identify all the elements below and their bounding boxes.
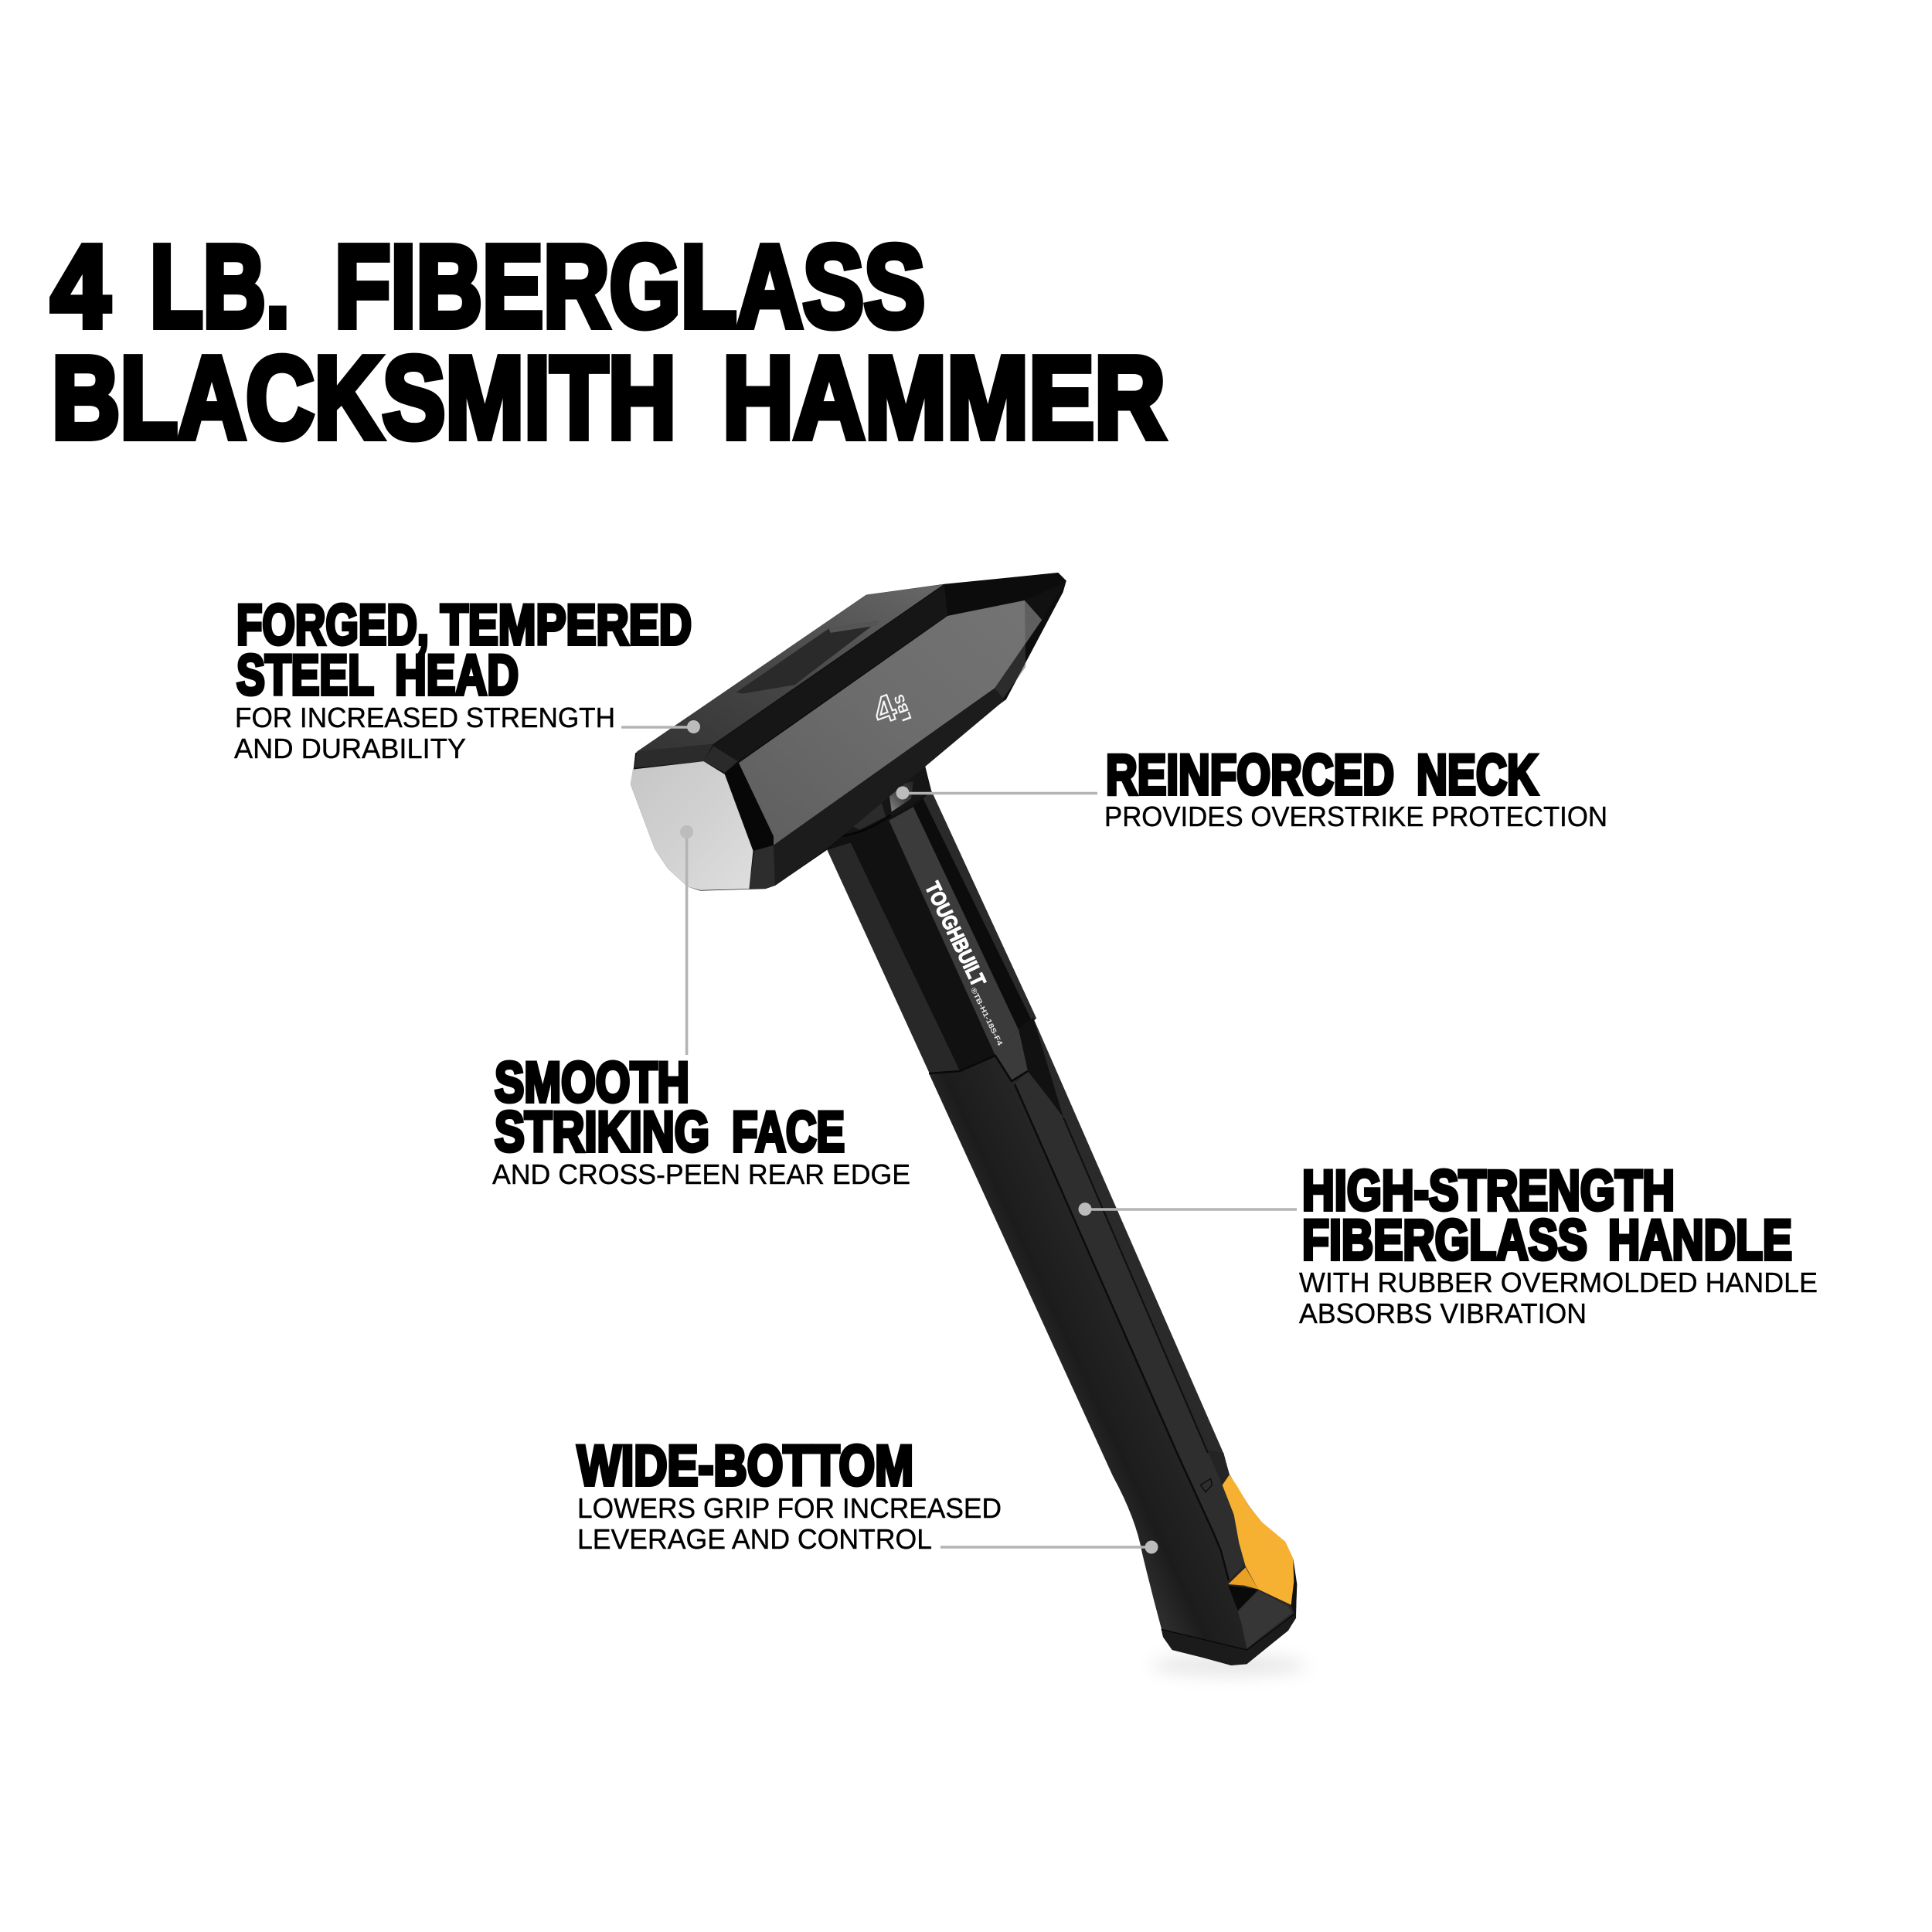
lower chamfer [774, 688, 1005, 886]
heading: FORGED, [236, 594, 429, 657]
heading: REINFORCED [1106, 743, 1394, 807]
brand mark on handle: TOUGHBUILT [920, 878, 990, 991]
heading line 2: FIBERGLASS [1302, 1209, 1587, 1272]
callout: high-strength fiberglass handle [1079, 1159, 1818, 1329]
description: WITH RUBBER OVERMOLDED HANDLE [1299, 1267, 1818, 1298]
hammer butt end with yellow insert [1162, 1451, 1297, 1665]
description: AND CROSS-PEEN REAR EDGE [492, 1158, 910, 1190]
title line 2: HAMMER [723, 332, 1165, 462]
small pictogram on grip [1200, 1478, 1212, 1492]
title line 1: FIBERGLASS [335, 221, 925, 351]
heading: HIGH-STRENGTH [1302, 1159, 1675, 1223]
central side face [739, 600, 1042, 845]
hammer illustration [631, 573, 1297, 1665]
hammer handle lower grip [929, 1018, 1297, 1665]
leader line [621, 720, 700, 733]
hammer head [631, 573, 1066, 891]
heading line 2: STRIKING [495, 1100, 709, 1164]
title line 1: LB. [150, 221, 290, 351]
model number on handle: ®TB-H1-18S-F4 [969, 986, 1005, 1047]
leader line [940, 1541, 1158, 1553]
description: PROVIDES OVERSTRIKE PROTECTION [1104, 801, 1607, 832]
slit beside grip panel [1019, 1018, 1063, 1117]
top slot [736, 621, 879, 694]
callout: forged tempered steel head [234, 594, 700, 764]
yellow insert [1223, 1475, 1294, 1605]
heading line 2: HANDLE [1608, 1209, 1792, 1272]
heading: TEMPERED [440, 594, 692, 657]
upper chamfer [713, 585, 947, 762]
description line 2: ABSORBS VIBRATION [1299, 1298, 1587, 1329]
description line 2: LEVERAGE AND CONTROL [577, 1523, 932, 1555]
ground shadow [1151, 1655, 1306, 1675]
heading: SMOOTH [495, 1051, 689, 1114]
callout: reinforced neck [896, 743, 1607, 832]
hammer handle upper section [827, 764, 1036, 1073]
description: FOR INCREASED STRENGTH [235, 702, 615, 733]
head silhouette [631, 573, 1066, 891]
description line 2: AND DURABILITY [234, 733, 466, 764]
leader line [680, 825, 693, 1055]
end of logo band [995, 1029, 1028, 1081]
title line 2: BLACKSMITH [52, 332, 676, 462]
leader line [1079, 1202, 1297, 1216]
callout: wide-bottom [577, 1434, 1158, 1555]
heading line 2: HEAD [395, 645, 519, 706]
callout: smooth striking face [492, 825, 910, 1190]
silver striking face [631, 761, 753, 890]
heading: NECK [1417, 743, 1538, 807]
corner facets [703, 746, 738, 773]
heading line 2: STEEL [236, 645, 373, 706]
heading: WIDE-BOTTOM [577, 1434, 913, 1498]
title line 1: 4 [51, 221, 110, 351]
peen tip facet [944, 573, 1066, 615]
title [51, 221, 1165, 462]
leader line [896, 787, 1097, 799]
4 LBS stamp: 4 [868, 686, 902, 733]
inner panel of grip [1015, 1071, 1244, 1580]
description: LOWERS GRIP FOR INCREASED [577, 1492, 1002, 1524]
hammer neck [833, 760, 930, 837]
top plane [637, 584, 944, 752]
heading line 2: FACE [732, 1100, 845, 1164]
4 LBS stamp: LBS [891, 692, 915, 723]
